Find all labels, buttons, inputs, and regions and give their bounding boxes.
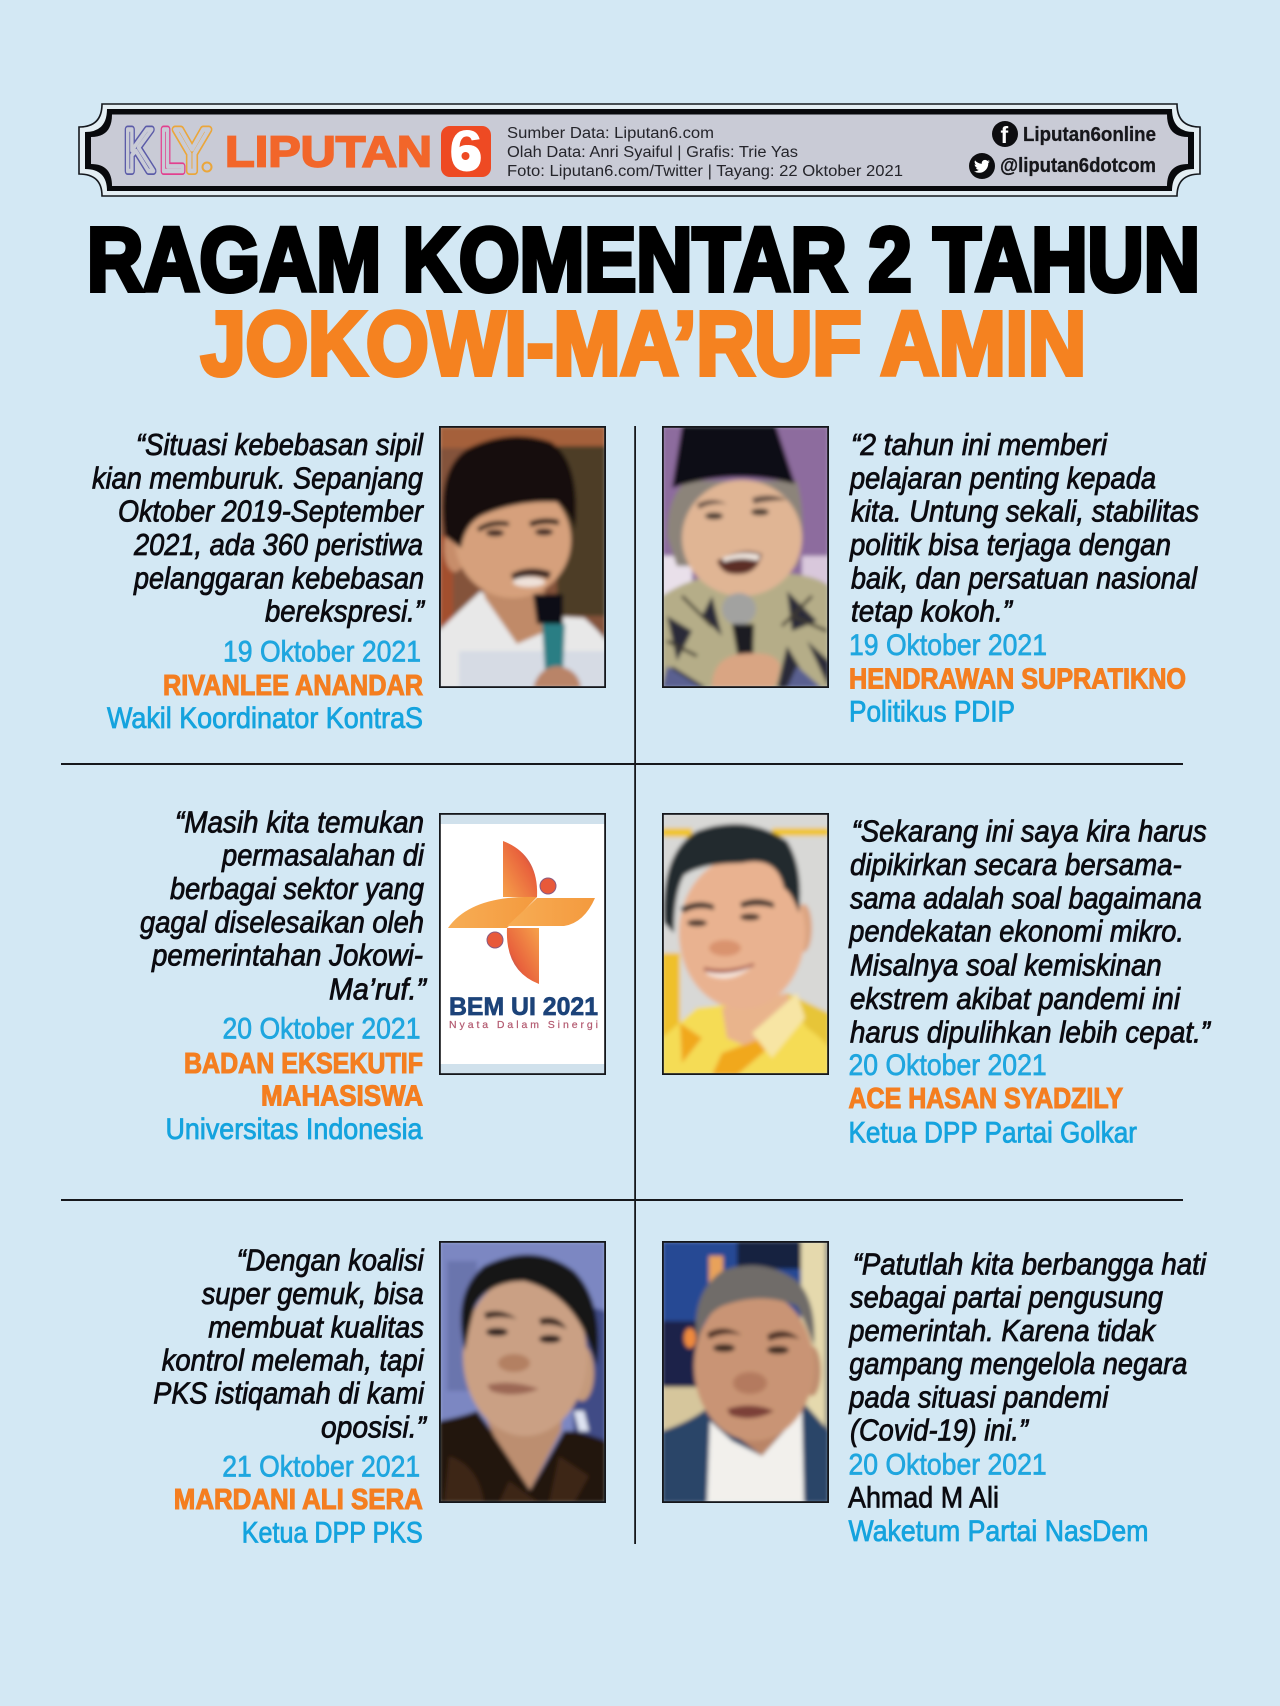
header banner (79, 104, 1200, 196)
quote: “2 tahun ini memberi (851, 428, 1108, 462)
logo: 6 badge: 6 (449, 119, 483, 184)
name: Ahmad M Ali (848, 1482, 999, 1515)
quote: ekstrem akibat pandemi ini (850, 982, 1181, 1016)
quote: (Covid-19) ini.” (850, 1414, 1030, 1448)
role: Ketua DPP Partai Golkar (848, 1117, 1137, 1150)
quote: baik, dan persatuan nasional (851, 561, 1198, 595)
name: BADAN EKSEKUTIF (184, 1048, 423, 1080)
social: facebook: Liputan6online (1023, 124, 1156, 146)
panel: Ahmad M Ali (848, 1247, 1207, 1548)
date: 19 Oktober 2021 (223, 636, 421, 669)
quote: politik bisa terjaga dengan (849, 528, 1171, 562)
panel: Ace Hasan Syadzily (848, 815, 1212, 1150)
logo: 6 badge (441, 119, 491, 184)
photo: Mardani Ali Sera (439, 1241, 606, 1503)
quote: kita. Untung sekali, stabilitas (851, 495, 1199, 529)
pinwheel emblem (448, 841, 595, 984)
quote (153, 1244, 428, 1444)
logo: KLY: L (160, 117, 184, 184)
name: MARDANI ALI SERA (174, 1484, 423, 1516)
social: twitter (969, 153, 1156, 179)
role: Wakil Koordinator KontraS (107, 702, 423, 735)
quote: tetap kokoh.” (851, 595, 1014, 629)
name: RIVANLEE ANANDAR (163, 670, 423, 702)
logo: KLY: Y (174, 117, 210, 184)
source credits: Olah Data: Anri Syaiful | Grafis: Trie Yas (507, 144, 798, 161)
source credits (507, 125, 903, 180)
logo: KLY: K (124, 117, 154, 184)
photo: Hendrawan Supratikno (662, 426, 829, 688)
name: ACE HASAN SYADZILY (848, 1083, 1123, 1115)
quote: pendekatan ekonomi mikro. (848, 915, 1184, 949)
quote: berekspresi.” (265, 595, 426, 629)
title (87, 210, 1200, 394)
name (184, 1048, 423, 1112)
quote: kontrol melemah, tapi (162, 1344, 425, 1378)
quote: membuat kualitas (208, 1310, 424, 1344)
quote (140, 805, 428, 1006)
quote: pelanggaran kebebasan (133, 561, 424, 595)
source credits: Foto: Liputan6.com/Twitter | Tayang: 22 Oktober 2021 (507, 163, 903, 180)
logo: KLY (124, 117, 212, 184)
logo: BEM UI 2021 (439, 813, 606, 1075)
quote: 2021, ada 360 peristiwa (133, 528, 423, 562)
role: Ketua DPP PKS (242, 1517, 423, 1550)
logo: KLY: L (160, 117, 184, 184)
quote: “Sekarang ini saya kira harus (852, 815, 1207, 849)
date: 20 Oktober 2021 (848, 1049, 1047, 1082)
quote: PKS istiqamah di kami (153, 1376, 425, 1410)
quote: sama adalah soal bagaimana (850, 881, 1202, 915)
source credits: Sumber Data: Liputan6.com (507, 125, 714, 142)
quote (849, 428, 1199, 629)
panel: BEM UI (140, 805, 428, 1146)
title: JOKOWI-MA’RUF AMIN (201, 294, 1086, 394)
quote: harus dipulihkan lebih cepat.” (850, 1015, 1212, 1049)
quote: Ma’ruf.” (329, 972, 428, 1006)
date: 21 Oktober 2021 (222, 1451, 420, 1484)
role: Waketum Partai NasDem (848, 1515, 1148, 1548)
quote: “Masih kita temukan (175, 805, 424, 839)
logo wordmark: BEM UI 2021 (449, 993, 598, 1021)
quote: dipikirkan secara bersama- (850, 848, 1182, 882)
quote: pada situasi pandemi (848, 1380, 1109, 1414)
role: Politikus PDIP (849, 696, 1015, 729)
quote (848, 815, 1212, 1049)
logo: Liputan: LIPUTAN (225, 128, 432, 176)
quote: “Dengan koalisi (237, 1244, 425, 1278)
quote: “Situasi kebebasan sipil (136, 428, 424, 462)
date: 20 Oktober 2021 (848, 1448, 1047, 1481)
quote: pemerintah. Karena tidak (848, 1314, 1157, 1348)
panel: Mardani Ali Sera (153, 1244, 428, 1550)
logo tagline: Nyata Dalam Sinergi (449, 1019, 598, 1031)
quote: Misalnya soal kemiskinan (850, 949, 1162, 983)
quote: super gemuk, bisa (202, 1277, 424, 1311)
quote: oposisi.” (321, 1410, 428, 1444)
quote: Oktober 2019-September (118, 495, 425, 529)
quote: permasalahan di (221, 839, 425, 873)
quote: berbagai sektor yang (170, 872, 424, 906)
role: Universitas Indonesia (166, 1113, 423, 1146)
quote: sebagai partai pengusung (850, 1281, 1163, 1315)
photo: Rivanlee Anandar (439, 426, 606, 688)
quote (92, 428, 426, 629)
date: 20 Oktober 2021 (222, 1012, 420, 1045)
quote: gampang mengelola negara (849, 1347, 1187, 1381)
social: facebook (992, 121, 1156, 148)
quote (848, 1247, 1207, 1448)
name: HENDRAWAN SUPRATIKNO (849, 664, 1186, 696)
quote: “Patutlah kita berbangga hati (853, 1247, 1207, 1281)
panel: Hendrawan Supratikno (849, 428, 1199, 729)
quote: pemerintahan Jokowi- (151, 939, 423, 973)
social: facebook: f (1000, 122, 1008, 148)
quote: kian memburuk. Sepanjang (92, 461, 423, 495)
quote: pelajaran penting kepada (849, 461, 1156, 495)
logo: KLY: K (124, 117, 154, 184)
photo: Ahmad M Ali (662, 1241, 829, 1503)
social: twitter: @liputan6dotcom (1000, 155, 1156, 177)
date: 19 Oktober 2021 (849, 629, 1047, 662)
quote: gagal diselesaikan oleh (140, 905, 424, 939)
photo: Ace Hasan Syadzily (662, 813, 829, 1075)
name: MAHASISWA (261, 1080, 423, 1112)
panel: Rivanlee Anandar (92, 428, 426, 735)
logo: KLY: Y (174, 117, 210, 184)
